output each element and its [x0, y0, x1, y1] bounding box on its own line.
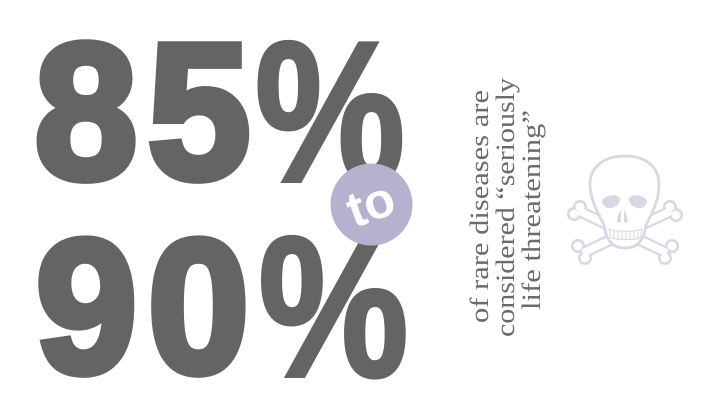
badge: to	[330, 164, 412, 246]
badge: to: to	[339, 170, 402, 238]
caption: rotated text: life threatening”	[517, 110, 546, 310]
stat: 85%: %	[255, 1, 405, 224]
stat: 85%: 5	[147, 5, 251, 220]
icon: skull and crossbones	[567, 156, 683, 265]
stat: 90%: %	[258, 196, 408, 417]
crossbones	[567, 200, 683, 265]
skull outline	[590, 156, 659, 248]
caption: rotated text	[465, 78, 546, 337]
caption: rotated text: considered “seriously	[491, 78, 520, 337]
teeth	[609, 229, 642, 240]
stat: 90%: 0	[148, 201, 249, 413]
stat: 85%: 8	[34, 5, 138, 220]
nose	[617, 210, 627, 223]
stat: 90%: 9	[36, 201, 137, 413]
stat: 85%	[34, 1, 405, 224]
stat: 90%	[36, 196, 409, 417]
eye sockets	[602, 195, 647, 208]
caption: rotated text: of rare diseases are	[465, 90, 494, 323]
